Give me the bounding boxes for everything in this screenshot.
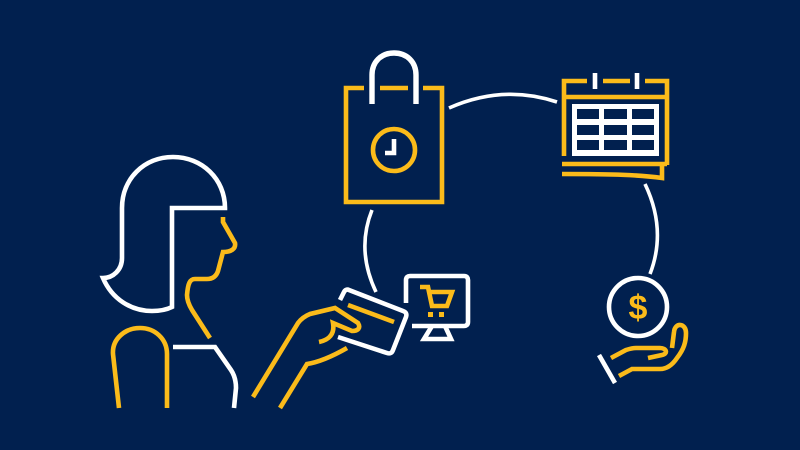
face profile xyxy=(187,217,235,338)
calendar pegs xyxy=(595,73,637,89)
clock hands xyxy=(385,139,394,153)
icon: payment card xyxy=(338,290,406,353)
coin ring xyxy=(609,278,667,336)
icon: shopping bag with clock xyxy=(346,53,442,202)
hand lower edge xyxy=(280,348,347,408)
card stripe xyxy=(348,305,394,322)
open hand xyxy=(611,325,686,376)
calendar table xyxy=(572,104,659,156)
dollar sign: $ xyxy=(629,289,648,327)
connector arc: card to bag xyxy=(365,210,376,292)
icon: calendar xyxy=(562,73,667,178)
icon: hand holding card xyxy=(253,308,359,408)
hand upper edge xyxy=(253,308,359,397)
connector arc: bag to calendar xyxy=(449,94,557,108)
monitor stand xyxy=(424,326,451,339)
icon: coin in hand xyxy=(599,278,686,383)
card outline xyxy=(338,290,406,353)
wrist line xyxy=(599,355,615,383)
near arm xyxy=(113,328,167,408)
shopping cart xyxy=(420,287,452,317)
calendar frame xyxy=(564,81,667,165)
icon: woman figure xyxy=(103,157,236,408)
shoulder and body xyxy=(173,347,236,408)
calendar pages xyxy=(562,164,667,178)
clock face xyxy=(373,129,415,171)
icon: monitor with cart xyxy=(406,276,468,339)
connector arc: calendar to coin xyxy=(645,184,657,274)
hair xyxy=(103,157,225,311)
bag handle xyxy=(372,53,416,104)
monitor screen xyxy=(406,276,468,326)
bag body xyxy=(346,88,442,202)
